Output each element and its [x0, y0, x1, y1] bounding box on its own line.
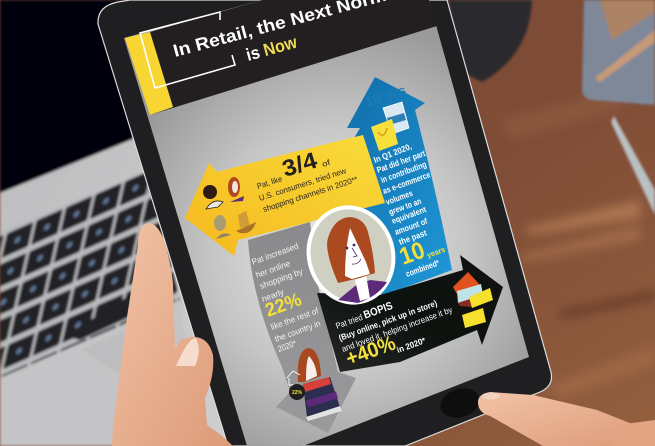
- background: dark round object: [448, 0, 532, 82]
- gray panel text: shopping by: [258, 266, 305, 291]
- icon: Pat with laptop: [298, 348, 342, 421]
- blue panel text: as e-commerce: [381, 169, 432, 196]
- gray panel text: [250, 241, 322, 354]
- black arrow panel: [317, 255, 503, 372]
- yellow panel text: Pat, like: [256, 174, 284, 191]
- gray panel text: the country in: [273, 318, 322, 344]
- icon: 22% badge: 22%: [292, 390, 303, 396]
- gray panel text: her online: [254, 258, 292, 280]
- screen background: [124, 0, 529, 446]
- gray panel text: like the rest of: [269, 305, 320, 332]
- icon: woman with red hair: [228, 177, 244, 202]
- blue arrow panel: [330, 77, 452, 296]
- yellow panel text: shopping channels in 2020**: [262, 175, 359, 214]
- black panel text: +40%: [343, 332, 399, 371]
- black panel text: (Buy online, pick up in store): [337, 298, 439, 343]
- icon: man with tan shirt: [236, 211, 256, 233]
- blue panel text: combined*: [404, 257, 441, 279]
- thumbnail: [176, 338, 199, 366]
- black panel text: and loved it, helping increase it by: [340, 304, 454, 354]
- background: gray notebook with pencils: [582, 0, 655, 105]
- right thumb: [478, 392, 655, 446]
- blue panel text: grew to an: [387, 196, 423, 217]
- icon: man with dark hair: [203, 185, 223, 209]
- yellow panel text: of: [321, 158, 332, 169]
- blue panel text: [372, 141, 447, 279]
- icon: house outline: [287, 371, 300, 385]
- gray panel text: nearly: [260, 286, 286, 304]
- faded 10 years label: 10 yrs: [363, 82, 408, 110]
- keyboard: [0, 170, 180, 378]
- icon: shopping bag: [371, 119, 398, 151]
- blue panel text: the past: [397, 228, 428, 247]
- left hand: [112, 223, 233, 446]
- header yellow tab: [125, 32, 173, 115]
- yellow panel text: 3/4: [279, 147, 320, 182]
- portrait circle: [296, 195, 406, 315]
- yellow panel text: U.S. consumers, tried new: [258, 166, 347, 203]
- thumbnail: [482, 392, 500, 400]
- header band: [150, 0, 437, 115]
- tablet home button: [437, 384, 483, 422]
- purple top: [338, 280, 387, 303]
- gray panel text: Pat increased: [250, 241, 300, 267]
- icon: 22% badge: [289, 384, 305, 400]
- blue panel text: in contributing: [379, 159, 428, 185]
- red hair: [327, 217, 375, 283]
- blue panel text: years: [426, 245, 447, 260]
- blue panel text: amount of: [393, 216, 429, 237]
- blue panel text: equivalent: [390, 204, 428, 226]
- icon: storefront with bags: [453, 272, 493, 328]
- icon: older woman: [214, 215, 231, 239]
- icon: browser window: [383, 102, 409, 134]
- face: [345, 228, 370, 279]
- black panel text: Pat tried BOPIS: [334, 300, 394, 332]
- black panel text: [334, 298, 454, 371]
- gray panel text: 2020*: [276, 338, 298, 354]
- title bracket: [140, 12, 235, 88]
- background: laptop: [0, 0, 240, 446]
- blue panel text: 10: [396, 237, 429, 271]
- yellow arrow panel: [185, 135, 385, 256]
- black panel text: in 2020*: [395, 335, 427, 355]
- tablet body: [98, 0, 552, 446]
- gray arrow panel: [248, 222, 356, 433]
- gray panel text: 22%: [263, 289, 305, 322]
- title: is Now: [244, 32, 300, 65]
- background: pen: [611, 116, 655, 215]
- neck: [355, 275, 370, 301]
- yellow panel text: [256, 147, 359, 214]
- blue panel text: In Q1 2020,: [372, 141, 413, 165]
- blue panel text: volumes: [384, 188, 414, 207]
- blue panel text: Pat did her part: [375, 148, 427, 175]
